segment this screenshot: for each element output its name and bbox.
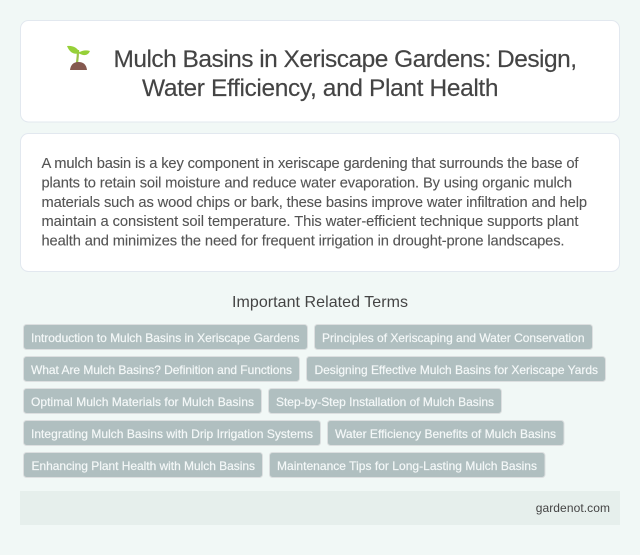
panel: description <box>20 134 620 272</box>
panel: title card <box>20 20 620 122</box>
icon: sprout <box>67 46 90 70</box>
chip: maintenance: Maintenance Tips for Long-Lasting Mulch Basins <box>277 459 537 473</box>
chip: principles: Principles of Xeriscaping and Water Conservation <box>322 331 584 345</box>
footer source text: gardenot.com <box>536 501 610 515</box>
chip: maintenance <box>270 452 545 478</box>
chip: what are mulch basins: What Are Mulch Basins? Definition and Functions <box>31 363 292 377</box>
chip: optimal materials <box>24 388 262 414</box>
chip: designing: Designing Effective Mulch Basins for Xeriscape Yards <box>314 363 598 377</box>
chip: step-by-step <box>268 388 502 414</box>
chip: plant health: Enhancing Plant Health with Mulch Basins <box>32 459 255 473</box>
chip: integrating: Integrating Mulch Basins with Drip Irrigation Systems <box>31 427 313 441</box>
chip: step-by-step: Step-by-Step Installation of Mulch Basins <box>276 395 494 409</box>
chip: introduction: Introduction to Mulch Basins in Xeriscape Gardens <box>31 331 300 345</box>
footer <box>20 491 620 525</box>
chip: integrating <box>24 420 320 446</box>
chip: designing <box>306 356 606 382</box>
heading: title <box>114 46 577 102</box>
heading: important related terms: Important Related Terms <box>232 294 408 311</box>
text block: description: maintain a consistent soil temperature. This water-efficient technique supports plant <box>42 214 578 230</box>
text block: description: materials such as wood chips or bark, these basins improve water infiltration and help <box>42 195 587 211</box>
chip: plant health <box>24 452 262 478</box>
chip: optimal materials: Optimal Mulch Materials for Mulch Basins <box>31 395 254 409</box>
heading: title: Water Efficiency, and Plant Health <box>142 75 498 102</box>
text block: description: A mulch basin is a key component in xeriscape gardening that surrounds the base of <box>42 156 579 172</box>
chip: what are mulch basins <box>24 356 300 382</box>
heading: title: Mulch Basins in Xeriscape Gardens: Design, <box>114 46 577 73</box>
text block: description: plants to retain soil moisture and reduce water evaporation. By using organic mulch <box>42 176 572 192</box>
chip: introduction <box>24 324 308 350</box>
chip: water efficiency: Water Efficiency Benefits of Mulch Basins <box>335 427 556 441</box>
text block: description: health and minimizes the need for frequent irrigation in drought-prone landscapes. <box>42 234 564 250</box>
text block: description <box>42 156 587 250</box>
chip: principles <box>314 324 592 350</box>
panel: related terms chips <box>24 324 606 478</box>
chip: water efficiency <box>328 420 564 446</box>
